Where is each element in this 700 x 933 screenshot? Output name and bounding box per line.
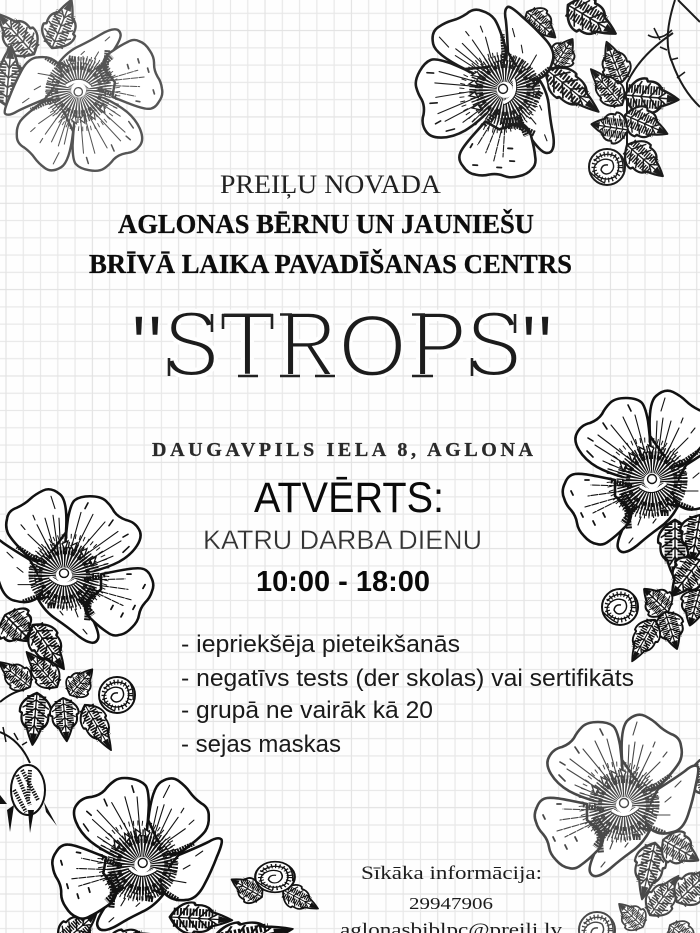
flower with leaves: left middle [0,489,153,756]
heading: organisation name: BRĪVĀ LAIKA PAVADĪŠANAS CENTRS [89,249,572,279]
contact information [340,863,563,933]
requirements list: - sejas maskas [181,731,341,758]
requirements list: - iepriekšēja pieteikšanās [181,631,460,658]
title: STROPS: " [131,298,163,398]
flower with leaves: top right [382,0,700,203]
title: STROPS: STR [162,296,337,406]
contact information: 29947906 [409,894,493,913]
heading: organisation name: PREIĻU NOVADA [220,170,441,199]
title: STROPS: " [521,298,553,398]
opening hours [203,474,482,598]
flower with leaves: bottom left [42,760,323,933]
title: STROPS: PS [410,296,523,406]
requirements list: - negatīvs tests (der skolas) vai sertifikāts [181,665,634,692]
opening hours: ATVĒRTS: [254,474,444,522]
title: STROPS [131,296,553,406]
rose hip bud on left edge [0,727,57,833]
heading: organisation name: AGLONAS BĒRNU UN JAUNIEŠU [118,209,534,239]
flower: top left [0,0,172,187]
address: DAUGAVPILS IELA 8, AGLONA [152,439,534,461]
title: STROPS: O [338,296,407,395]
opening hours: 10:00 - 18:00 [256,566,430,598]
heading: organisation name [89,170,572,279]
flower with leaves: right middle [563,391,700,667]
requirements list: - grupā ne vairāk kā 20 [181,697,433,724]
requirements list [181,631,634,758]
opening hours: KATRU DARBA DIENU [203,525,482,555]
flower with leaves: bottom right [535,715,700,933]
contact information: Sīkāka informācija: [361,863,542,884]
